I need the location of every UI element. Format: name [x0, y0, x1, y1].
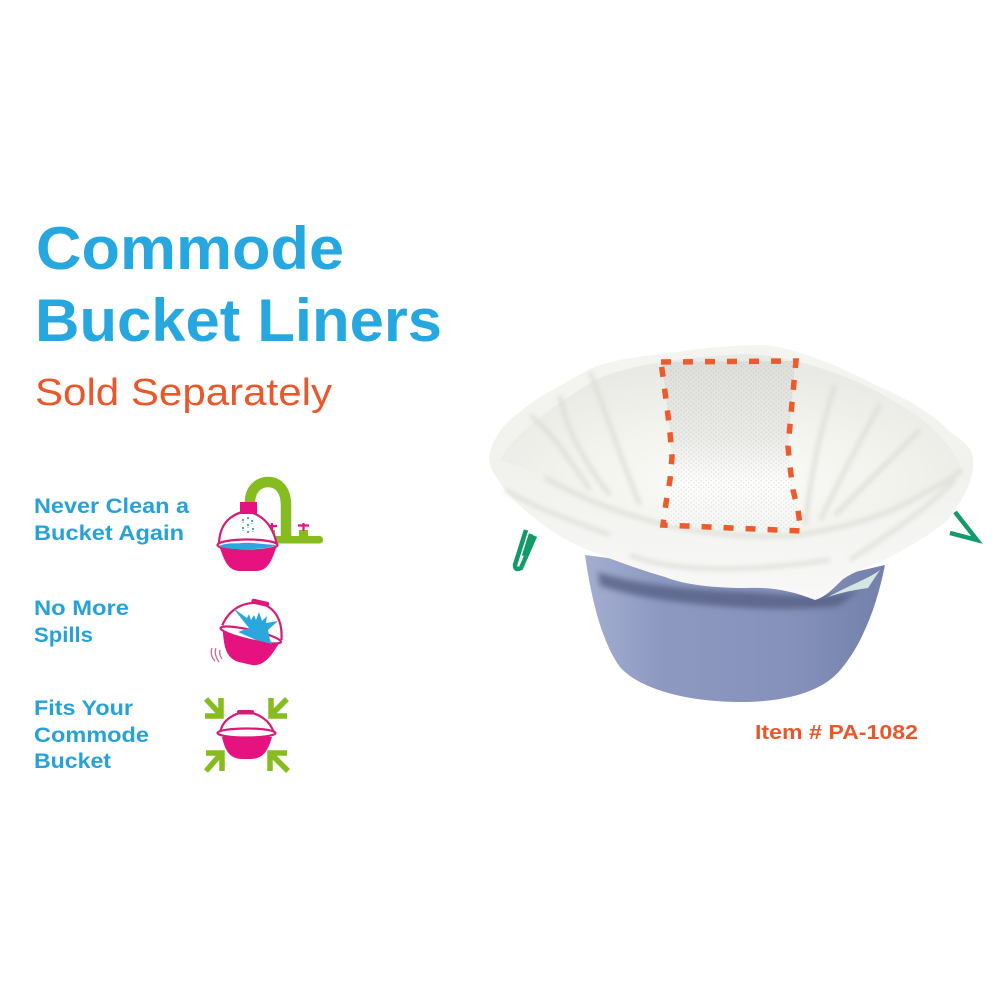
title: Commode — [36, 215, 344, 282]
feature text: no more spills: Spills — [34, 624, 93, 647]
liner interior — [500, 354, 962, 537]
product photo: lined commode bucket — [489, 345, 977, 702]
feature text: fits your commode bucket: Commode — [34, 724, 149, 747]
liner — [489, 345, 973, 600]
feature text: fits your commode bucket: Fits Your — [34, 697, 133, 720]
liner blue-white fold right — [820, 570, 880, 600]
icon: faucet over bucket — [218, 482, 323, 571]
green right tie — [950, 512, 977, 540]
subtitle: Sold Separately — [35, 372, 332, 414]
blue bucket — [585, 555, 885, 702]
title — [35, 215, 442, 354]
feature text: never clean a bucket again: Bucket Again — [34, 522, 184, 545]
liner wrinkles — [505, 372, 962, 569]
feature text: never clean a bucket again: Never Clean a — [34, 495, 189, 518]
orange dashed outline — [661, 361, 801, 531]
title: Bucket Liners — [35, 287, 442, 354]
icon: tilted bucket with splash — [211, 593, 289, 670]
feature text: never clean a bucket again — [34, 495, 189, 545]
icon: bucket with inward arrows — [205, 698, 288, 771]
item number: Item # PA-1082 — [755, 722, 918, 744]
feature text: no more spills: No More — [34, 597, 129, 620]
feature text: fits your commode bucket: Bucket — [34, 750, 111, 773]
feature text: fits your commode bucket — [34, 697, 149, 773]
green left tie — [515, 530, 535, 569]
feature text: no more spills — [34, 597, 129, 647]
absorbent pad — [662, 361, 800, 531]
bucket shadow under liner — [598, 572, 860, 609]
